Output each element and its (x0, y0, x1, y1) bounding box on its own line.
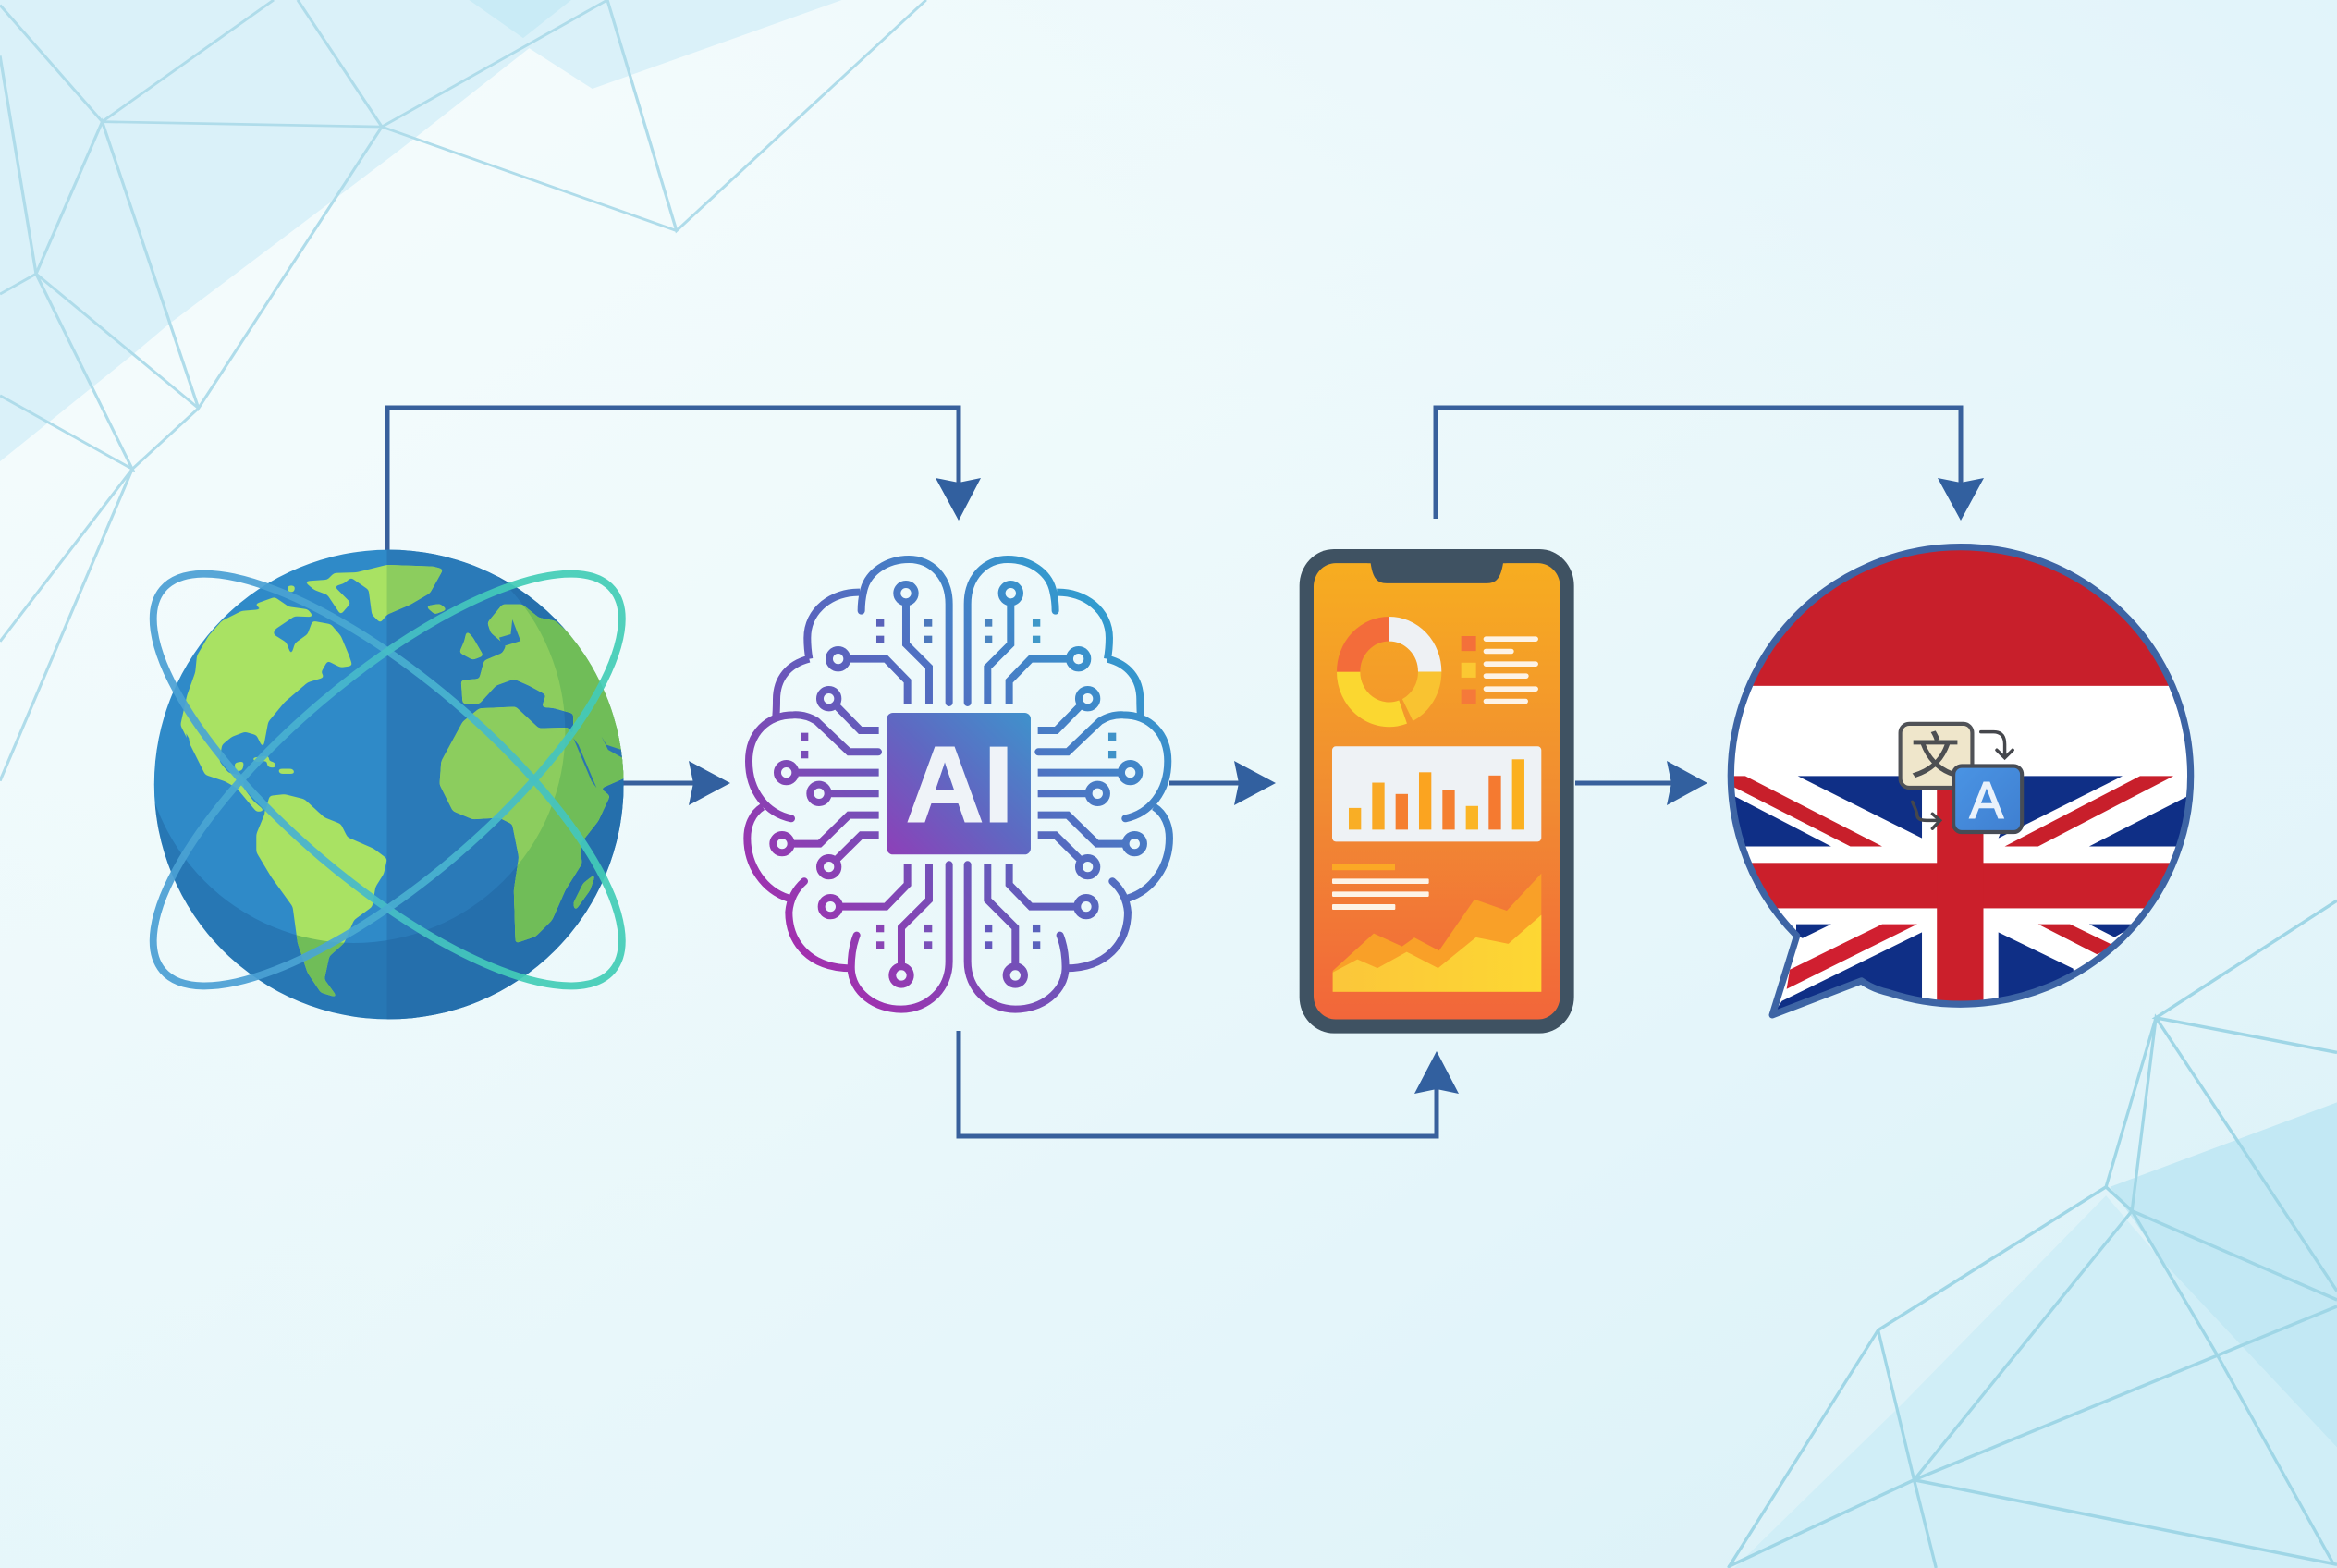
left hemisphere (747, 559, 949, 1010)
right hemisphere (968, 559, 1169, 1010)
globe shading and continents (155, 549, 624, 1019)
donut legend (1462, 636, 1536, 704)
arrow: AI brain down and under to phone (959, 1031, 1459, 1136)
translate arrow: top (1981, 732, 2013, 758)
background mesh: top left (0, 0, 926, 781)
translate arrow: bottom (1913, 802, 1940, 828)
AI chip: AI (906, 724, 1013, 844)
arrow: phone to translation bubble (1575, 761, 1707, 805)
phone body (1300, 549, 1574, 1034)
background mesh: bottom right (1728, 900, 2337, 1568)
icon: AI circuit brain (747, 559, 1169, 1010)
text placeholder lines (1332, 864, 1429, 910)
phone notch (1367, 559, 1506, 583)
translate badge: source character card: 文 (1912, 729, 1959, 784)
icon: smartphone dashboard (1300, 549, 1574, 1034)
AI chip (887, 713, 1031, 854)
icon: globe with orbit rings (150, 549, 626, 1019)
globe ocean (154, 550, 624, 1019)
translate badge: source character card (1901, 724, 1972, 788)
area chart (1333, 874, 1541, 992)
translate badge: target letter card (1953, 766, 2022, 832)
icon: speech bubble with Union Jack and translate badge (1727, 544, 2195, 1019)
donut chart (1349, 629, 1430, 715)
arrow: globe to AI brain (621, 761, 730, 805)
bar chart card (1332, 746, 1541, 841)
flag fill (1734, 550, 2187, 1010)
phone screen (1314, 563, 1560, 1020)
translate badge: target letter card: A (1970, 771, 2003, 829)
bubble outline (1731, 547, 2191, 1015)
arrow: globe up and over to AI brain (387, 408, 981, 551)
orbit rings (96, 511, 679, 1048)
arrow: phone up and over to translation bubble (1436, 408, 1984, 521)
arrow: AI brain to phone (1169, 761, 1276, 805)
